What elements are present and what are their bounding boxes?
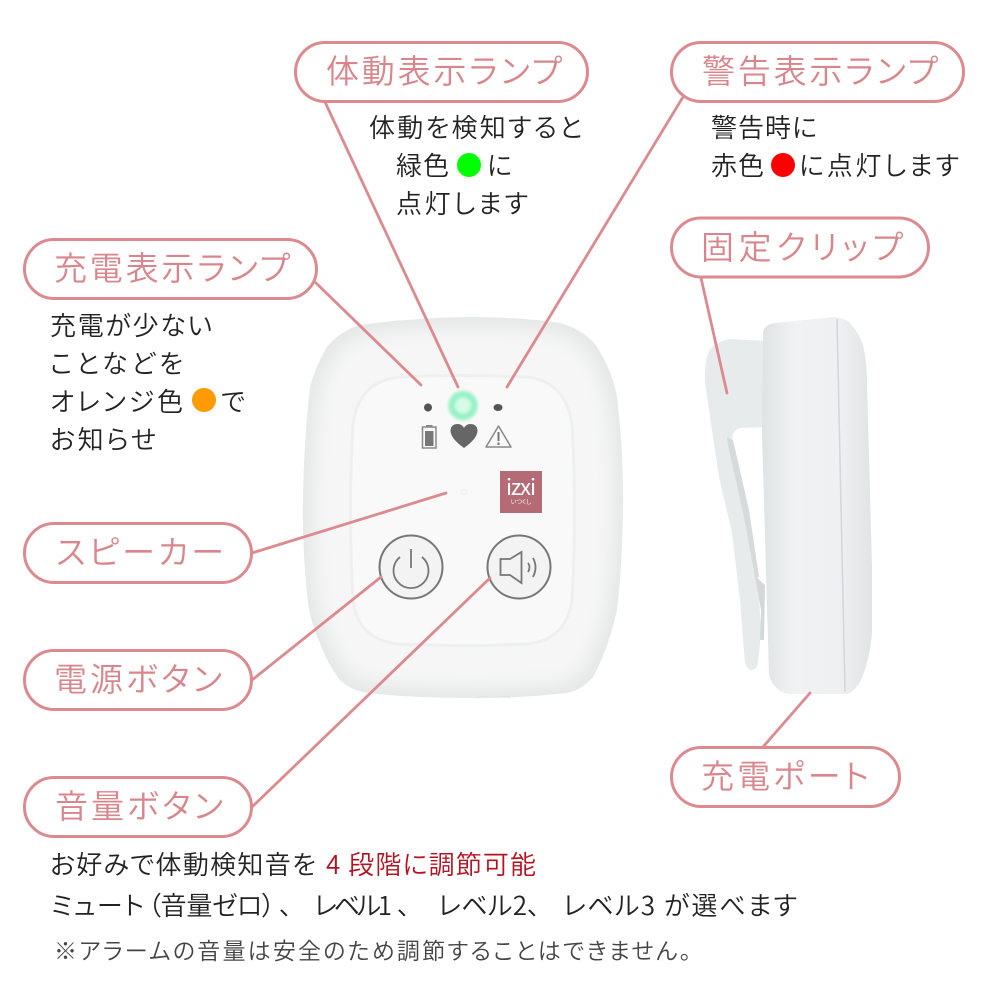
volume button [488,536,550,598]
text: volume description: レベル1 [314,886,392,923]
label: warning lamp: 警告表示ランプ [702,45,939,93]
label: speaker [24,524,252,582]
charging port bumps [475,696,510,698]
clip hinge [755,576,765,640]
label: power button: 電源ボタン [54,653,222,701]
speaker hole [461,489,467,495]
text: volume description: 、 [397,886,410,923]
icon: heart [450,424,478,448]
icon: red dot [771,153,795,177]
logo: izxi [500,470,542,513]
text: charge lamp description: 充電が少ない [50,306,212,343]
indicator dot: warning [494,404,502,411]
text: charge lamp description: オレンジ色 [50,382,183,419]
icon: battery [422,425,436,448]
label: charge lamp: 充電表示ランプ [54,242,291,290]
icon: orange dot [192,388,216,412]
label: volume button: 音量ボタン [55,780,223,828]
indicator lamp: green glow [446,389,480,422]
leader lines [252,97,810,807]
text: body motion lamp description: に [487,146,512,183]
icon: warning triangle [486,426,511,447]
text: warning lamp description: 警告時に [711,108,817,145]
label: volume button [24,778,252,836]
label: warning lamp [672,42,964,102]
logo: izxi: izxi [506,470,536,502]
inner panel [350,376,574,646]
device side view [705,317,872,694]
text: volume description: 、 [527,886,540,923]
text: volume description [50,845,797,966]
text: volume description: ※アラームの音量は安全のため調節することはできません。 [54,932,691,966]
icon: green dot [457,153,481,177]
label: power button [24,650,252,710]
text: charge lamp description: で [221,382,245,419]
text: warning lamp description: に点灯します [799,146,959,183]
text: volume description: （音量ゼロ） [148,886,275,923]
power button [380,536,442,598]
text: volume description: 4 段階に調節可能 [326,845,536,882]
text: charge lamp description: ことなどを [50,344,183,381]
indicator dot: battery [424,404,432,412]
device body [295,310,630,705]
label: fixing clip: 固定クリップ [701,221,904,269]
label: speaker: スピーカー [56,526,224,574]
text: warning lamp description: 赤色 [711,146,764,183]
label: body motion lamp [296,42,588,102]
text: body motion lamp description: 緑色 [396,146,449,183]
label: fixing clip [672,218,928,277]
label: charging port [672,748,900,806]
clip [705,339,765,670]
text: volume description: お好みで体動検知音を [50,845,316,882]
text: charge lamp description: お知らせ [50,420,156,457]
main body [762,317,872,694]
text: volume description: ミュート [51,886,144,923]
text: volume description: レベル2 [438,886,527,923]
text: volume description: レベル3 [563,886,655,923]
logo: izxi: いつくし [511,497,532,506]
label: charge lamp [24,240,316,298]
text: body motion lamp description [369,108,582,221]
clip inner shading [727,437,759,577]
label: body motion lamp: 体動表示ランプ [326,45,563,93]
device front view [295,310,630,705]
text: charge lamp description [50,306,245,457]
seam [837,319,845,692]
text: body motion lamp description: 点灯します [396,184,528,221]
label: charging port: 充電ポート [701,750,869,798]
text: volume description: が選べます [664,886,797,923]
text: warning lamp description [711,108,959,183]
text: volume description: 、 [279,886,292,923]
text: body motion lamp description: 体動を検知すると [369,108,582,145]
